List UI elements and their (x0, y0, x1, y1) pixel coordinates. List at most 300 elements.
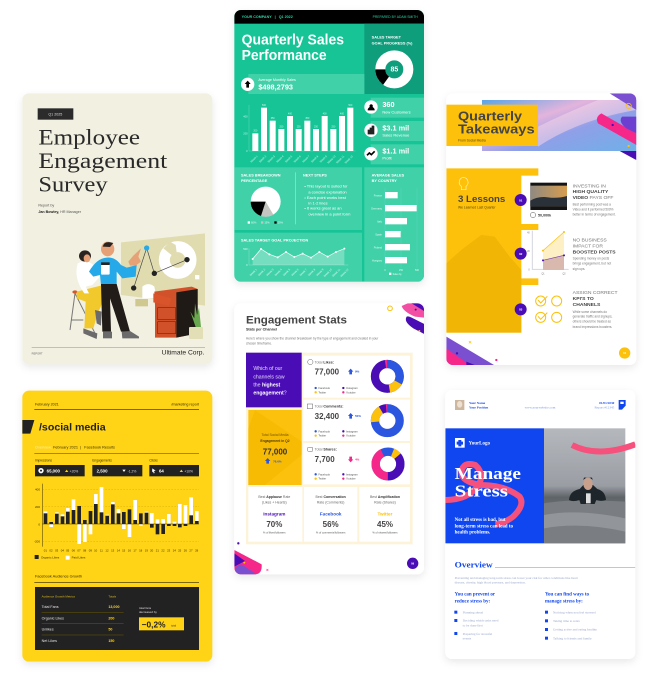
footer (32, 347, 205, 357)
lesson 2: area chart: IMPACT FOR (573, 244, 603, 250)
row: total likes: 77,000 (315, 368, 340, 377)
panel: sales breakdown and next steps: a concise explanation (308, 190, 347, 195)
column: manage stress: Noticing when you feel stressed (553, 611, 596, 615)
row: total shares: 4% (355, 457, 360, 461)
card: manage stress (445, 390, 635, 659)
bar chart: organic and paid likes: 24 (173, 549, 176, 553)
heading: Stats per Channel (246, 328, 277, 332)
lesson 2: area chart: Q2 (562, 273, 566, 275)
panel: sales target goal projection: Week 8 (307, 267, 316, 277)
panel: target goal progress: SALES TARGET (372, 36, 402, 40)
lesson 1: video: 01 (519, 198, 523, 202)
metric: engagements: Engagements (92, 459, 112, 463)
decoration: ribbon over photo (572, 444, 635, 452)
panel: sales target goal projection: Week 10 (323, 267, 333, 278)
panel: yellow lessons column: 3 Lessons (458, 194, 505, 204)
panel: average sales by country: France (374, 193, 383, 197)
heading: Employee (38, 124, 140, 149)
lesson 1: video: INVESTING IN (573, 183, 606, 189)
panel: sales target goal projection: Week 3 (265, 267, 275, 277)
panel: sales breakdown and next steps: overview in a point form (308, 211, 351, 216)
bar chart: monthly sales: 400 (243, 114, 248, 118)
bar chart: monthly sales: 0 (246, 149, 248, 153)
intro text: Not all stress is bad, but (455, 518, 506, 523)
panel: sales target goal projection: Week 6 (290, 267, 300, 277)
bar chart: organic and paid likes (34, 484, 199, 560)
bar chart: organic and paid likes: 07 (77, 549, 81, 553)
bar chart: monthly sales: Week 1 (249, 154, 259, 163)
bar chart: organic and paid likes: 0 (38, 522, 40, 526)
callout: highest engagement question: Which of our (253, 366, 283, 372)
metric: engagements (92, 459, 142, 476)
stat: best applause rate: Best Applause Rate (258, 495, 290, 499)
panel: audience growth table: Audience Growth Metrics (42, 594, 76, 598)
row: total likes: 9% (355, 370, 360, 374)
panel: total engagement: 77,000 (263, 448, 288, 457)
lesson 2: area chart: brings engagement, but not (573, 262, 611, 266)
lesson 3: checkmarks: CHANNELS (573, 302, 601, 308)
card: social media report (22, 391, 212, 662)
row: total likes: Total Likes: (315, 360, 334, 364)
panel: sales target goal projection: 0 (246, 263, 248, 267)
bar chart: organic and paid likes: 22 (161, 549, 165, 553)
bar chart: organic and paid likes: 03 (55, 549, 59, 553)
bar chart: monthly sales: 200 (253, 131, 258, 133)
stat: best conversation rate: % of comments/followers (316, 530, 346, 534)
column: manage stress: manage stress by: (545, 599, 583, 604)
column: prevent stress: You can prevent or (455, 593, 496, 598)
bar chart: organic and paid likes: 200 (35, 505, 40, 509)
page number badge (619, 347, 630, 359)
bar chart: monthly sales: Week 9 (319, 154, 328, 163)
panel: audience growth table: total (171, 624, 176, 628)
panel: average sales by country: BY COUNTRY (372, 179, 397, 183)
heading: Engagement Stats (246, 314, 347, 326)
stats: customers, revenue, profit: New Customers (382, 109, 411, 114)
author credit: Report by (38, 204, 54, 208)
bar chart: organic and paid likes: 08 (83, 549, 87, 553)
row: total shares: Instagram (346, 472, 359, 476)
row: total likes: Twitter (318, 390, 326, 394)
stat: best applause rate: (Likes + Hearts) (262, 501, 287, 505)
bar chart: organic and paid likes: 04 (61, 549, 64, 553)
row: total comments (303, 400, 410, 441)
panel: sales target goal projection: Week 2 (257, 267, 266, 277)
lesson 2: area chart: 0 (528, 270, 530, 272)
lesson 2: area chart: NO BUSINESS (573, 238, 607, 244)
panel: sales target goal projection (234, 233, 362, 282)
lesson 3: checkmarks: others should be treated as (573, 320, 611, 324)
panel: audience growth table: 50 (108, 628, 112, 632)
panel: total engagement (248, 410, 302, 485)
column: prevent stress: Deciding which tasks need (463, 619, 499, 623)
column: manage stress: You can find ways to (545, 593, 590, 598)
stat: best amplification rate: Best Amplification (370, 495, 400, 499)
stat: best amplification rate: Rate (Shares) (374, 501, 396, 505)
bar chart: monthly sales: 350 (305, 118, 310, 120)
panel: average sales by country: Hungary (372, 258, 383, 262)
bar chart: monthly sales: 250 (331, 126, 336, 128)
panel: audience growth table: Unlikes (42, 628, 54, 632)
bar chart: organic and paid likes: 02 (49, 549, 53, 553)
stat: best amplification rate: % of shares/followers (372, 530, 398, 534)
metric: impressions: Impressions (35, 459, 52, 463)
metric: impressions: 65,000 (47, 468, 60, 473)
panel: yellow lessons column (446, 168, 538, 333)
overview text: Preventing and managing long-term stress can lower your risk for other conditions like heart (455, 576, 578, 580)
panel: audience growth table: decreased by (139, 610, 157, 614)
panel: blue title block: YourLogo (469, 442, 490, 447)
bar chart: organic and paid likes: 25 (178, 549, 182, 553)
row: total comments: Youtube (346, 434, 356, 438)
author credit: Jan Bowley, HR Manager (38, 210, 82, 214)
lesson 3: checkmarks: generate traffic and signups, (573, 315, 613, 319)
lesson 3: checkmarks: While some channels do (573, 310, 607, 314)
stat: best conversation rate: Best Conversation (316, 495, 346, 499)
bar chart: organic and paid likes: 06 (72, 549, 75, 553)
metric: impressions: +20% (70, 469, 78, 473)
callout: highest engagement question: engagement? (253, 390, 287, 396)
row: total comments: 50% (355, 414, 361, 418)
bar chart: monthly sales: 500 (262, 105, 267, 107)
stats: customers, revenue, profit: $1.1 mil (382, 146, 409, 155)
bar chart: organic and paid likes: 19 (145, 549, 148, 553)
bar chart: monthly sales: 400 (340, 113, 345, 115)
lesson 2: area chart: sign ups. (573, 267, 585, 271)
panel: audience growth table: total fans (139, 606, 152, 610)
heading (246, 314, 378, 346)
bar chart: monthly sales: Week 3 (267, 154, 276, 163)
panel: audience growth table: Net Likes (42, 639, 57, 643)
decoration: bottom left shapes: × (266, 568, 269, 573)
lesson 2: area chart: 40 (527, 232, 530, 234)
panel: average sales by country: Italy (377, 219, 383, 223)
section title: Overview: February 2021 | Facebook Results (35, 445, 115, 449)
bar chart: organic and paid likes: 18 (139, 549, 143, 553)
bar chart: organic and paid likes: 28 (195, 549, 199, 553)
bar chart: organic and paid likes: 13 (111, 549, 115, 553)
metric: engagements: -1.2% (128, 469, 136, 473)
decoration: bottom left shapes (234, 542, 269, 574)
column: manage stress: Getting active and eating healthy (553, 628, 597, 632)
stats: customers, revenue, profit (364, 98, 424, 164)
panel: audience growth table (35, 587, 199, 650)
heading: Engagement (38, 148, 168, 173)
row: total shares: Total Shares: (315, 448, 337, 452)
panel: audience growth table: 150 (108, 639, 114, 643)
bar chart: monthly sales: Week 5 (284, 154, 293, 163)
panel: average sales by country: 0 (384, 270, 386, 272)
lesson 3: checkmarks: ASSIGN CORRECT (573, 290, 618, 296)
lesson 1: video: Video and it performed 500% (573, 207, 614, 211)
panel: hero photo (544, 428, 625, 543)
panel: sales breakdown and next steps: 60% (251, 221, 257, 225)
bar chart: monthly sales: 400 (323, 113, 327, 115)
header row: Your Name (469, 401, 486, 405)
header row: www.yourwebsite.com (525, 405, 556, 409)
bar chart: monthly sales: 200 (243, 132, 248, 136)
panel: total engagement: Engagement in Q2 (260, 439, 290, 443)
page number badge (407, 558, 418, 569)
panel: audience growth table: 200 (108, 616, 114, 620)
lesson 1: video: Best performing post was a (573, 203, 611, 207)
row: total comments: Twitter (318, 434, 326, 438)
decoration: bottom left shapes: × (468, 340, 472, 346)
metric: engagements: 2,500 (97, 468, 108, 473)
heading: Quarterly Sales (242, 31, 344, 48)
column: prevent stress: reduce stress by: (455, 599, 491, 604)
column: manage stress: Talking to friends and family (553, 636, 592, 640)
panel: average sales by country: Poland (374, 245, 383, 249)
lesson 2: area chart: Q1 (541, 273, 545, 275)
panel: sales target goal projection: SALES TARGET GOAL PROJECTION (241, 239, 309, 243)
card: employee engagement survey (22, 93, 212, 364)
stats: customers, revenue, profit: Sales Revenue (382, 132, 410, 137)
lesson 1: video: better in terms of engagement. (573, 213, 616, 217)
panel: audience growth table: −0,2% (142, 619, 166, 629)
lesson 2: area chart: 20 (527, 251, 530, 253)
panel: sales target goal projection: Week 4 (274, 267, 283, 277)
panel: sales target goal projection: Week 11 (331, 267, 341, 278)
heading block: Takeaways (458, 122, 535, 137)
banner image with shapes (482, 93, 636, 160)
column: prevent stress: Planning ahead (463, 611, 483, 615)
bar chart: monthly sales: 250 (297, 126, 301, 128)
bar chart: organic and paid likes: 400 (35, 488, 40, 492)
decoration: top right shapes (388, 302, 425, 334)
lesson 1: video: VIDEO PAYS OFF (573, 195, 613, 201)
row: total shares: Youtube (346, 477, 356, 481)
column: prevent stress: events (463, 636, 472, 640)
bar chart: organic and paid likes: -200 (34, 540, 40, 544)
metric: clicks: +10% (184, 469, 193, 473)
bar chart: organic and paid likes: 23 (167, 549, 171, 553)
callout: highest engagement question: channels saw (253, 374, 285, 380)
lesson 2: area chart (515, 231, 616, 275)
panel: total engagement: Total Social Media (261, 433, 289, 437)
card: quarterly takeaways (446, 93, 636, 365)
stat: best amplification rate: Twitter (378, 512, 393, 517)
overview text (455, 576, 578, 586)
panel: sales breakdown and next steps: • This layout is suited for (304, 184, 348, 189)
illustration: people presenting a chart (70, 233, 205, 339)
panel: sales breakdown and next steps: PERCENTAGE (241, 179, 268, 183)
panel: sales breakdown and next steps: SALES BREAKDOWN (241, 173, 281, 177)
panel: sales target goal projection: Week 1 (249, 267, 258, 277)
stat: best applause rate (248, 487, 302, 542)
footer: Ultimate Corp. (162, 351, 205, 357)
column: manage stress (545, 593, 597, 640)
lesson 1: video: 50,000k (538, 214, 552, 218)
panel: sales breakdown and next steps (234, 167, 362, 230)
bar chart: monthly sales: Week 2 (258, 154, 267, 163)
stat: best amplification rate (359, 487, 410, 542)
row: total likes: Instagram (346, 386, 359, 390)
panel: sales target goal projection: 500 (243, 247, 248, 251)
metric: clicks: Clicks (149, 459, 158, 463)
bar chart: monthly sales: Week 8 (310, 154, 319, 163)
panel: average sales by country: AVERAGE SALES (372, 173, 405, 177)
column: manage stress: Taking time to relax (553, 619, 580, 623)
bar chart: organic and paid likes: 21 (156, 549, 159, 553)
bar chart: monthly sales: Week 11 (335, 154, 345, 164)
top bar (234, 10, 424, 24)
lesson 3: checkmarks (515, 290, 618, 329)
callout: highest engagement question: the highest (253, 382, 281, 388)
lesson 3: checkmarks: KPI'S TO (573, 296, 594, 302)
stat: average monthly sales: Average Monthly Sales (258, 78, 296, 82)
heading: Here's where you show the channel breakdown by the type of engagement and created in your (246, 337, 378, 341)
bar chart: monthly sales (243, 105, 356, 165)
overview text: disease, obesity, high blood pressure, and depression. (455, 581, 526, 586)
callout: highest engagement question (246, 353, 302, 407)
bar chart: organic and paid likes: 10 (94, 549, 98, 553)
bar chart: monthly sales: 250 (314, 126, 319, 128)
stat: best conversation rate: Facebook (320, 512, 342, 517)
page number badge: 09 (411, 561, 415, 565)
bar chart: organic and paid likes: 01 (44, 549, 47, 553)
decoration: bottom left shapes (446, 337, 497, 365)
stats: customers, revenue, profit: Profit (382, 155, 393, 160)
bar chart: organic and paid likes: 27 (189, 549, 193, 553)
page number badge: 10 (623, 351, 627, 355)
heading (38, 124, 168, 197)
panel: target goal progress: 85 (390, 67, 398, 74)
header line: /marketing report (171, 403, 199, 407)
panel: sales target goal projection: Week 9 (315, 267, 325, 277)
heading: chosen timeframe. (246, 342, 272, 346)
heading block: From Social Media (458, 138, 486, 142)
stat: best applause rate: Instagram (263, 512, 285, 517)
bar chart: organic and paid likes: 26 (184, 549, 187, 553)
stats: customers, revenue, profit: $3.1 mil (382, 123, 409, 132)
bar chart: organic and paid likes: Paid Likes (72, 556, 86, 560)
row: total likes: Youtube (346, 390, 356, 394)
heading: Performance (242, 47, 327, 64)
lesson 2: area chart: 02 (519, 252, 523, 256)
stat: best conversation rate (304, 487, 357, 542)
panel: audience growth table: Totals (108, 594, 117, 598)
bar chart: monthly sales: 350 (271, 118, 275, 120)
heading block: Quarterly (458, 109, 523, 124)
overview heading: Overview (455, 561, 493, 570)
heading block (446, 105, 538, 146)
stat: best conversation rate: 56% (323, 520, 339, 529)
heading: Survey (38, 172, 108, 197)
metric: clicks (149, 459, 199, 476)
heading: Stress (455, 481, 508, 500)
panel: blue title block (445, 428, 544, 543)
row: total likes: Facebook (318, 386, 331, 390)
panel: sales breakdown and next steps: in 1-2 lines (308, 201, 328, 206)
bar chart: monthly sales: Week 7 (301, 154, 311, 163)
bar chart: organic and paid likes: 17 (133, 549, 137, 553)
panel: sales breakdown and next steps: NEXT STEPS (303, 173, 327, 177)
panel: average sales by country: 250 (399, 270, 404, 272)
bar chart: organic and paid likes: Organic Likes (41, 556, 60, 560)
lesson 3: checkmarks: brand impressions boosters. (573, 325, 612, 329)
card: quarterly sales performance (234, 10, 424, 282)
column: prevent stress: to be done first (463, 623, 483, 627)
bar chart: monthly sales: Week 12 (344, 154, 354, 165)
panel: average sales by country (364, 167, 424, 282)
panel: cream backdrop (246, 353, 413, 544)
row: total likes (303, 356, 410, 398)
panel: sales breakdown and next steps: • Each point works best (304, 195, 347, 200)
row: total comments: Instagram (346, 429, 359, 433)
top bar: PREPARED BY ADAM SMITH (373, 15, 418, 19)
bar chart: monthly sales: 500 (348, 105, 353, 107)
section title: audience growth: Facebook Audience Growth (35, 575, 82, 579)
panel: average sales by country: Germany (371, 206, 383, 210)
stat: average monthly sales (241, 74, 364, 94)
author credit (38, 204, 82, 214)
column: prevent stress (454, 593, 499, 640)
panel: sales target goal projection: Week 12 (339, 267, 350, 278)
panel: audience growth table: Total Fans (42, 605, 59, 609)
lesson 2: area chart: BOOSTED POSTS (573, 249, 616, 255)
header line (34, 403, 199, 410)
heading (454, 468, 520, 496)
bar chart: monthly sales: Week 6 (293, 154, 302, 163)
row: total shares: Facebook (318, 472, 331, 476)
row: total shares (303, 443, 410, 484)
panel: audience growth table: Organic Likes (42, 616, 64, 620)
lesson 3: checkmarks: 03 (519, 308, 523, 312)
panel: average sales by country: Sales by (393, 274, 402, 276)
bar chart: organic and paid likes: 20 (150, 549, 154, 553)
row: total comments: Facebook (318, 429, 331, 433)
panel: average sales by country: Spain (375, 232, 383, 236)
header row: Report #12345 (594, 406, 615, 410)
panel: sales breakdown and next steps: 25% (278, 221, 284, 225)
bar chart: monthly sales: Week 4 (275, 154, 285, 163)
header row (455, 400, 626, 410)
bar chart: monthly sales: Week 10 (326, 154, 337, 165)
stat: best applause rate: % of likes/followers (263, 530, 286, 534)
panel: sales target goal projection: Week 7 (299, 267, 308, 277)
row: total comments: 32,400 (315, 412, 340, 421)
heading (242, 34, 344, 60)
footer: REPORT (32, 352, 43, 356)
stat: best conversation rate: Rate (Comments) (317, 501, 344, 505)
intro text: long-term stress can lead to (455, 524, 513, 529)
header line: February 2021 (35, 403, 59, 407)
bar chart: organic and paid likes: 05 (66, 549, 70, 553)
bar chart: monthly sales: 400 (288, 113, 293, 115)
row: total shares: Twitter (318, 477, 326, 481)
panel: sales breakdown and next steps: 15% (264, 221, 270, 225)
row: total shares: 7,700 (315, 455, 335, 464)
panel: target goal progress (364, 24, 424, 94)
lesson 2: area chart: Spending money on posts (573, 257, 610, 261)
bar chart: organic and paid likes: 11 (100, 549, 103, 553)
stat: best amplification rate: 45% (377, 520, 393, 529)
bar chart: organic and paid likes: 12 (105, 549, 109, 553)
lesson 1: video (515, 183, 616, 218)
badge: quarter (38, 108, 73, 120)
badge: quarter: Q1 2025 (48, 113, 62, 117)
decoration: pink ribbon (445, 464, 521, 524)
heading: /social media (39, 423, 106, 434)
bar chart: monthly sales: 250 (279, 126, 284, 128)
panel: total engagement: 76.6% (273, 460, 282, 464)
metric: clicks: 64 (159, 468, 164, 473)
panel: sales target goal projection: Week 5 (282, 267, 291, 277)
column: prevent stress: Preparing for stressful (463, 632, 492, 636)
metric: impressions (35, 459, 85, 476)
panel: yellow lessons column: We Learned Last Quarter (458, 206, 496, 210)
